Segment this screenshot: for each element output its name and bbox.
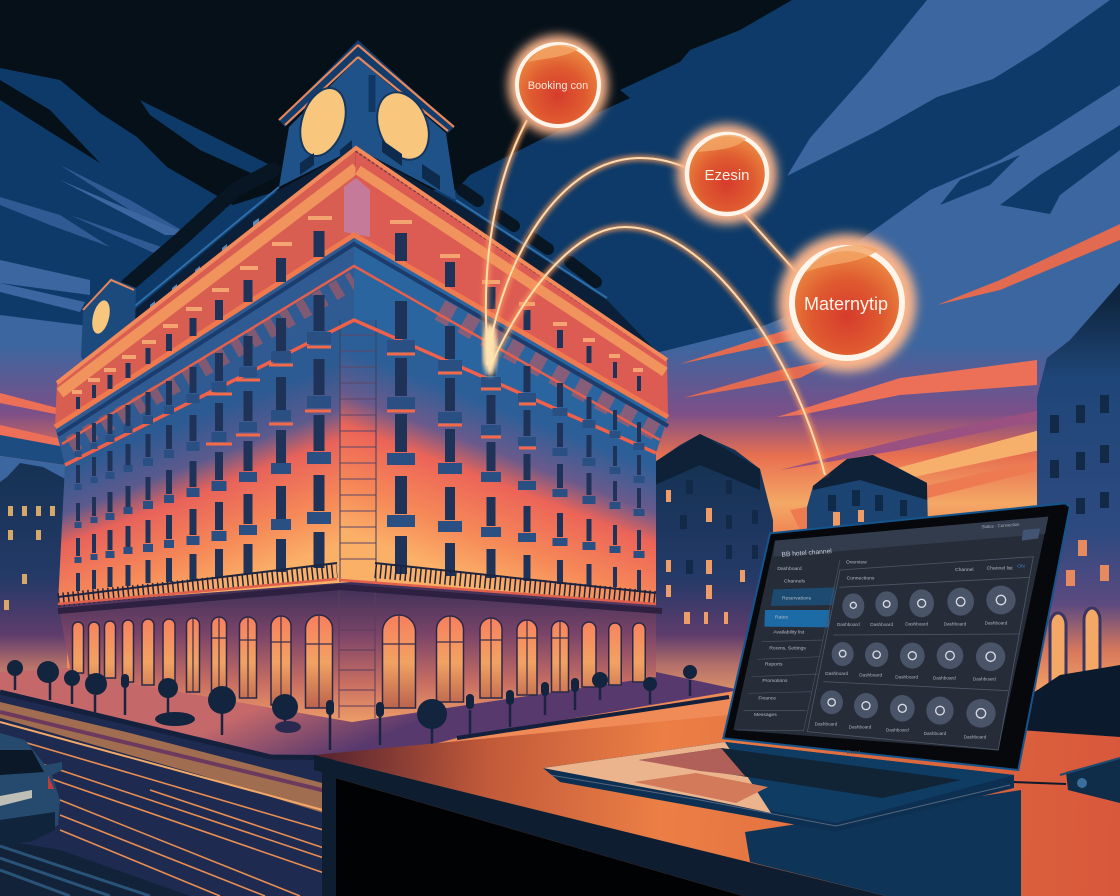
- cornice bands: [55, 148, 668, 465]
- icon labels: Dashboard: [933, 675, 956, 680]
- icon labels: Dashboard: [849, 724, 872, 729]
- icon labels: Dashboard: [964, 734, 987, 739]
- balcony balustrade right: [340, 563, 662, 611]
- sidebar text: Finance: [758, 695, 776, 701]
- laptop shadow on table: [745, 790, 1021, 896]
- icon labels: Dashboard: [895, 674, 918, 679]
- panel header text: Channel: [955, 567, 974, 573]
- arc origin glow: [483, 324, 497, 376]
- table front dark: [336, 778, 743, 896]
- window columns right facade: [401, 233, 639, 590]
- balconies: [78, 332, 639, 563]
- corner pier lines: [339, 590, 375, 718]
- street trees and lamps: [7, 660, 697, 750]
- night sky dark area: [0, 0, 792, 205]
- balcony balustrade left: [58, 563, 340, 611]
- icon labels: Dashboard: [905, 622, 928, 627]
- panel header text: Channel list: [987, 565, 1013, 571]
- panel header text: [846, 559, 1025, 581]
- icon labels: Dashboard: [870, 622, 893, 627]
- sidebar text: Dashboard: [777, 566, 802, 572]
- header text: BB hotel channel: [781, 548, 833, 559]
- bezel: [723, 503, 1070, 770]
- bubble: Ezesin: [677, 124, 777, 224]
- icon labels: Dashboard: [944, 621, 967, 626]
- connection arcs: [486, 120, 825, 475]
- bubble: Ezesin: Ezesin: [704, 167, 750, 184]
- corner quoins: [340, 178, 376, 582]
- table top: [314, 712, 1120, 896]
- clock tower: [279, 40, 456, 200]
- sidebar text: Promotions: [762, 678, 788, 684]
- bubble: Maternytip: [778, 234, 916, 372]
- icon labels: Dashboard: [859, 673, 882, 678]
- navy upper sky: [0, 0, 1120, 352]
- right foreground building: [1037, 283, 1120, 690]
- main panel frame: [807, 557, 1033, 750]
- icon: left clock face: [292, 82, 354, 162]
- sidebar text: Availability list: [773, 629, 805, 635]
- icon labels: Dashboard: [985, 621, 1008, 626]
- bubble: Booking: Booking con: [528, 80, 588, 92]
- road with light trails: [0, 692, 729, 896]
- upper window pediments: [72, 218, 643, 392]
- sidebar selected row: [764, 610, 830, 627]
- sidebar text: [754, 566, 812, 718]
- bubble: Maternytip: Maternytip: [804, 294, 888, 314]
- panel header text: ON: [1017, 564, 1025, 570]
- sidebar active row: [771, 587, 835, 606]
- centre distant building: [807, 455, 928, 530]
- panel header text: Overview: [846, 559, 867, 565]
- trackpad: [634, 773, 768, 803]
- icon labels: Dashboard: [825, 671, 848, 676]
- back ledge behind table: [1025, 665, 1120, 737]
- sidebar text: Rates: [775, 615, 789, 621]
- icon labels: Dashboard: [924, 731, 947, 736]
- top right text: Status · Connection: [981, 522, 1020, 529]
- right distant building: [655, 434, 773, 690]
- sidebar text: Channels: [784, 579, 806, 585]
- sidebar text: Messages: [754, 712, 777, 718]
- screen panel: [733, 517, 1048, 751]
- connection arcs glow: [486, 120, 825, 475]
- icon circles: [820, 586, 1016, 728]
- laptop base: [543, 742, 1014, 832]
- laptop screen: [723, 503, 1070, 770]
- window columns left facade: [78, 231, 319, 591]
- sidebar text: Rooms, Settings: [769, 645, 806, 651]
- car: [0, 733, 62, 845]
- building attic and roof plants: [80, 148, 660, 375]
- arch mullions: [193, 615, 569, 708]
- sidewalk: [0, 668, 740, 758]
- sky brush streaks: [0, 0, 1120, 530]
- device on table: [1014, 758, 1120, 803]
- table edge: [314, 755, 886, 896]
- brand label: Dwad: [847, 750, 860, 756]
- ground floor right: [352, 582, 656, 722]
- icon labels: Dashboard: [837, 622, 860, 627]
- icon labels: Dashboard: [886, 728, 909, 733]
- sidebar dividers: [737, 560, 840, 732]
- left background building: [0, 463, 67, 680]
- panel header text: Connections: [847, 575, 875, 581]
- icon glyphs: [828, 595, 1006, 718]
- keyboard: [639, 748, 961, 798]
- ground floor left: [58, 582, 352, 722]
- icon labels: [815, 621, 1008, 739]
- icon: right clock face: [368, 85, 438, 167]
- arched windows: [72, 615, 645, 708]
- sidebar text: Reports: [765, 662, 783, 668]
- bubble: Booking: [508, 35, 608, 135]
- main building right facade: [352, 148, 668, 603]
- sidebar text: Reservations: [782, 595, 812, 601]
- small left tower: [81, 278, 136, 372]
- icon labels: Dashboard: [815, 722, 838, 727]
- main building left facade: [55, 148, 356, 604]
- icon labels: Dashboard: [973, 677, 996, 682]
- window sills: [206, 347, 536, 448]
